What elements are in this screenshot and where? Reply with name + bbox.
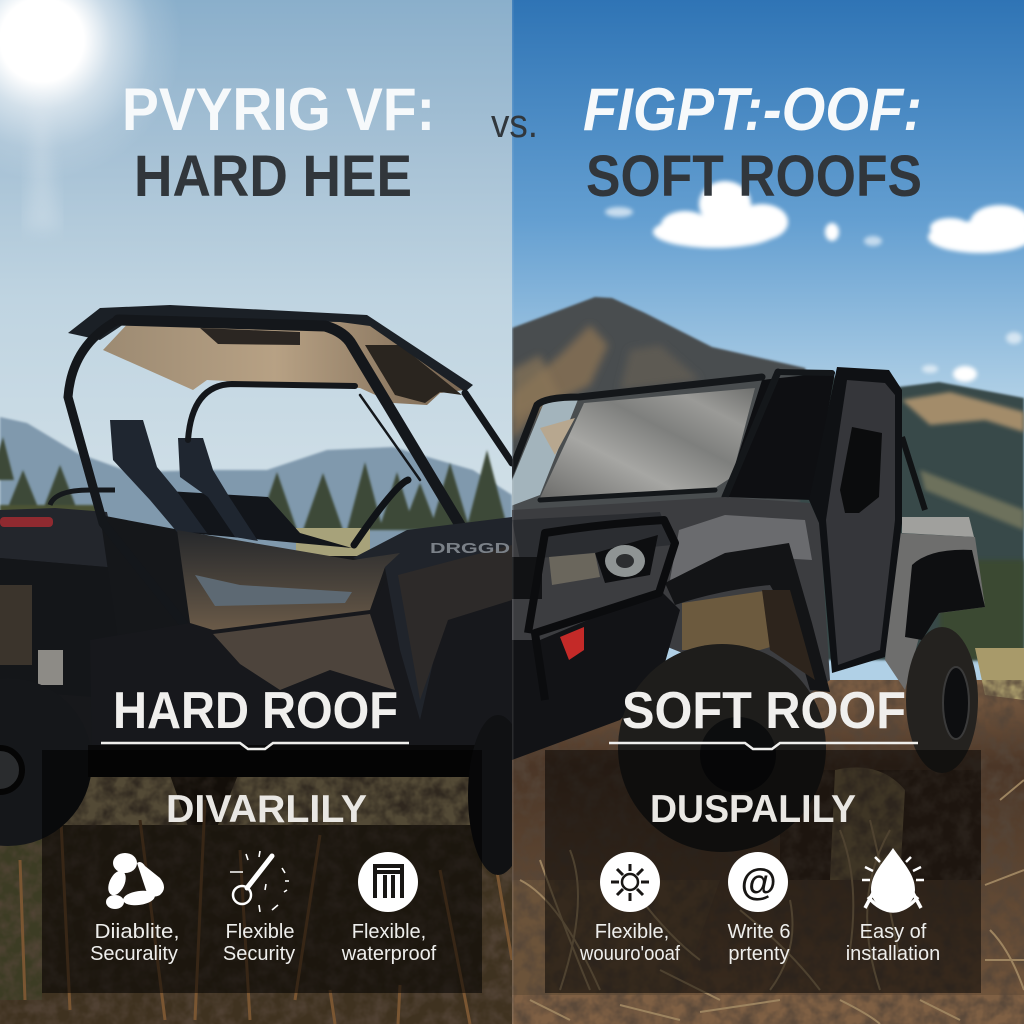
far ridge <box>800 372 1024 660</box>
vs label: vs. <box>491 102 538 146</box>
body sides and hood <box>512 497 830 700</box>
captions: left: Security <box>223 943 295 965</box>
headlight housing <box>595 535 658 583</box>
lower door reflection <box>213 614 395 690</box>
left panel: hard roof scene <box>0 0 528 1024</box>
cockpit interior <box>177 492 352 548</box>
lower body <box>510 517 512 518</box>
icon: at-sign circle <box>728 852 788 912</box>
left windshield window <box>512 400 578 506</box>
mountain <box>512 296 808 510</box>
door reflection stripe <box>195 575 352 606</box>
heading: soft roof: SOFT ROOF <box>622 682 906 740</box>
cab opening <box>725 372 835 500</box>
ground <box>512 648 1024 1024</box>
tree line <box>0 437 508 530</box>
bed rail <box>902 517 974 537</box>
mud well <box>682 590 815 680</box>
captions: left: Diiablite, <box>94 921 180 943</box>
sun <box>0 0 182 230</box>
headlight panel <box>549 553 600 585</box>
right panel: soft roof scene <box>498 0 1024 1024</box>
captions: right: wouuro'ooaf <box>579 943 680 965</box>
steering wheel <box>354 480 408 545</box>
captions: right: Write 6 <box>728 921 790 943</box>
hard roof vehicle <box>0 305 528 875</box>
front wheel <box>618 644 826 852</box>
title: left <box>122 76 435 209</box>
captions: left <box>90 921 437 965</box>
seats <box>110 420 258 541</box>
canopy sunroof <box>200 328 300 345</box>
captions: left: Flexible, <box>352 921 426 943</box>
captions: left: Flexible <box>226 921 294 943</box>
distant mountains <box>0 417 512 560</box>
central divider <box>512 0 514 1024</box>
title: left: HARD HEE <box>134 144 412 209</box>
roll bars <box>63 314 512 528</box>
title: left: PVYRIG VF: <box>122 76 435 143</box>
rear frame <box>0 558 150 700</box>
icon: at-sign circle: @ <box>740 862 776 903</box>
dash and front panel <box>353 517 512 720</box>
captions: right: prtenty <box>728 943 790 965</box>
subheading: right: DUSPALILY <box>650 788 856 831</box>
rear wheel <box>906 627 978 773</box>
door window <box>840 427 882 513</box>
captions: right: installation <box>846 943 940 965</box>
shadow base behind vehicle <box>0 556 387 745</box>
overlay panel: soft roof specs <box>545 750 981 993</box>
suspension dark <box>512 590 680 760</box>
icon: gate circle <box>358 852 418 912</box>
overlay panel: hard roof specs <box>42 750 482 993</box>
side logo: DRGGD <box>430 540 510 557</box>
red marker <box>560 627 584 660</box>
captions: right: Easy of <box>860 921 927 943</box>
captions: right <box>579 921 940 965</box>
captions: right: Flexible, <box>595 921 669 943</box>
rear rack <box>50 490 115 505</box>
grille <box>512 557 542 599</box>
front fender arch <box>665 543 830 692</box>
rear frame gap filler <box>102 516 181 568</box>
heading: hard roof: HARD ROOF <box>113 682 398 740</box>
sunlit grass <box>296 528 370 556</box>
title: right <box>583 76 922 209</box>
rear bodywork <box>0 508 118 568</box>
red tail light <box>0 517 53 527</box>
right wheel <box>468 715 512 875</box>
icon: sun circle <box>600 852 660 912</box>
title: right: SOFT ROOFS <box>586 144 922 209</box>
rear silver body <box>885 533 985 690</box>
tarp windscreen <box>540 388 755 498</box>
left wheel <box>0 678 92 846</box>
captions: left: Securality <box>90 943 178 965</box>
icon: linked blobs <box>105 853 164 909</box>
icon: key with sparks <box>230 851 289 912</box>
rear fender <box>905 550 985 640</box>
engine detail <box>0 585 63 685</box>
captions: left: waterproof <box>341 943 437 965</box>
title: right: FIGPT:-OOF: <box>583 76 922 143</box>
bull bar <box>528 520 675 700</box>
ground <box>0 765 512 1024</box>
icon: water drop <box>862 848 924 911</box>
canopy top <box>68 305 473 392</box>
soft roof vehicle <box>498 367 985 852</box>
rear hoop <box>902 437 925 510</box>
roof frame <box>498 372 832 505</box>
clouds <box>605 181 1024 382</box>
door <box>809 367 902 673</box>
headlight <box>605 545 645 577</box>
chassis rail <box>88 745 483 777</box>
canopy underside <box>103 318 465 405</box>
glossy door <box>177 530 400 630</box>
canopy right shade <box>365 345 462 403</box>
subheading: left: DIVARLILY <box>166 788 367 831</box>
